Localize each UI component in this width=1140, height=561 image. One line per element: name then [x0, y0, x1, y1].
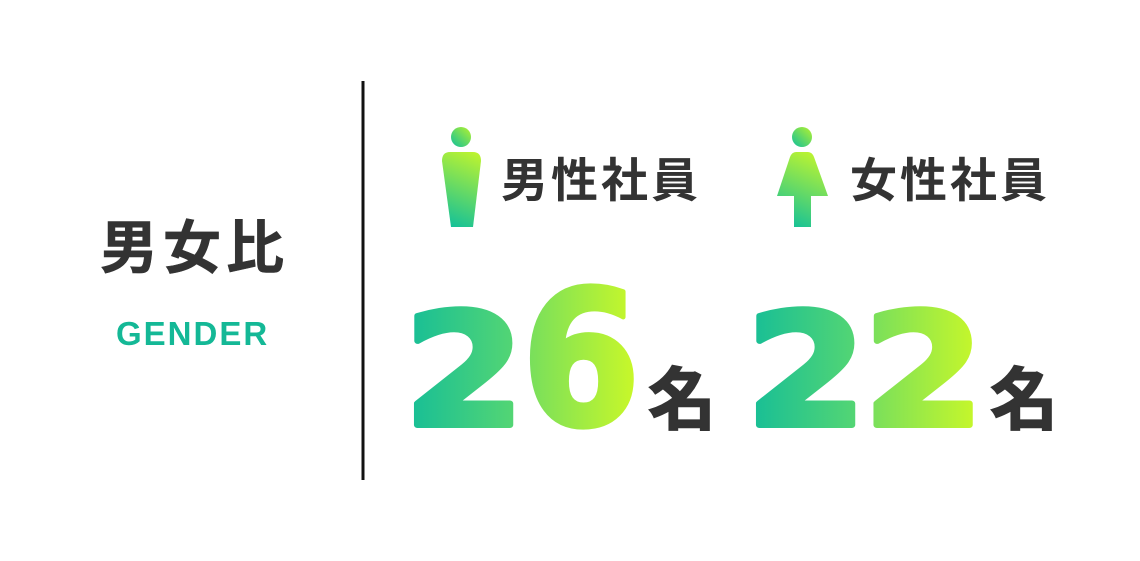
icon: female	[777, 127, 828, 227]
unit: 名: 名	[648, 363, 716, 439]
label: 男性社員: 男性社員	[501, 154, 701, 207]
number: 26 male: 6	[522, 252, 641, 469]
unit: 名: 名	[990, 363, 1058, 439]
subheading: GENDER: GENDER	[116, 315, 269, 352]
icon: male	[442, 127, 481, 227]
vertical divider	[362, 81, 364, 480]
heading: 男女比: 男女比	[100, 216, 289, 281]
number: 22 female: 2	[863, 281, 985, 463]
label: 女性社員: 女性社員	[850, 154, 1050, 207]
number: 26 male	[404, 252, 641, 469]
number: 26 male: 2	[404, 281, 525, 463]
number: 22 female: 2	[746, 281, 867, 463]
number: 22 female	[746, 281, 985, 463]
